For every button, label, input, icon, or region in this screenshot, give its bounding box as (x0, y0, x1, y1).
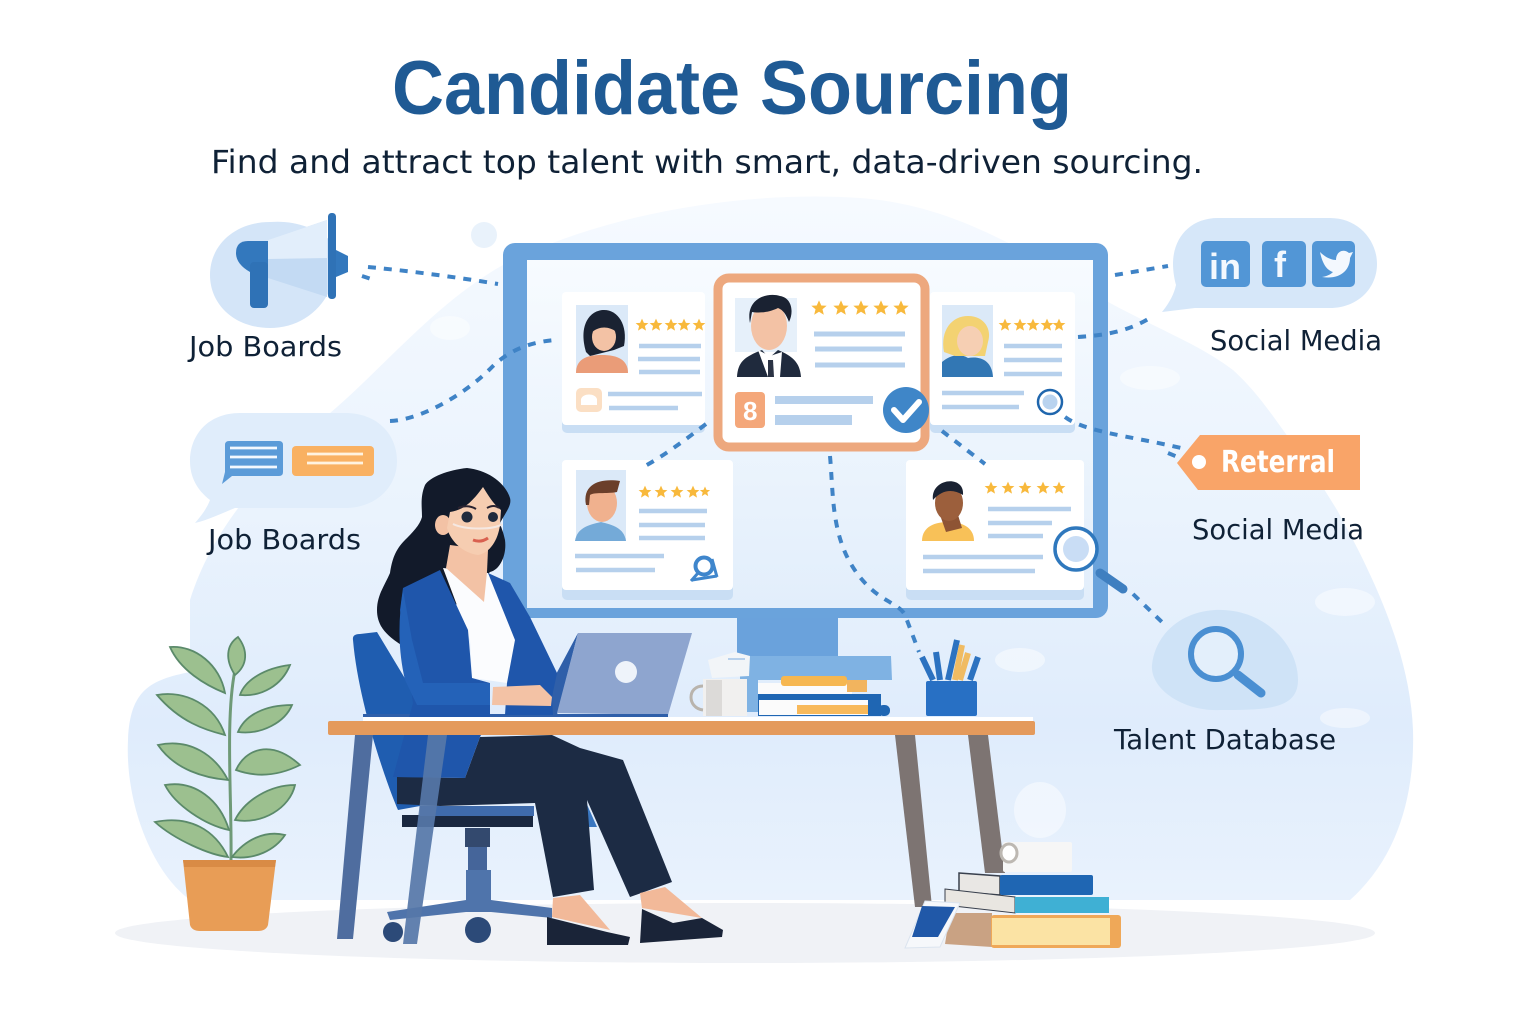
ear (435, 515, 451, 535)
dashed connectors (362, 266, 1181, 652)
face (447, 487, 501, 555)
subtitle: Find and attract top talent with smart, data-driven sourcing. (211, 143, 1203, 181)
label: job boards top: Job Boards (187, 330, 342, 363)
foot left (552, 895, 610, 930)
icon: job boards megaphone (210, 213, 348, 328)
icon: screen magnifier (1055, 528, 1123, 589)
icon: talent database magnifier (1152, 610, 1298, 710)
icon: social media bubble: f (1274, 244, 1287, 285)
background blob (115, 197, 1413, 963)
blazer left (393, 570, 490, 778)
desk legs far side (895, 735, 1005, 907)
blazer right (488, 573, 557, 715)
candidate card: featured centre (718, 278, 929, 447)
hair (377, 468, 510, 646)
label: social media lower: Social Media (1192, 513, 1364, 546)
hand (492, 685, 552, 706)
foot right (640, 887, 702, 918)
plant (155, 637, 300, 931)
candidate card: bottom left (562, 460, 733, 600)
monitor (503, 243, 1108, 712)
neck (446, 545, 488, 602)
label: job boards lower: Job Boards (206, 523, 361, 556)
blazer sleeve (399, 590, 490, 705)
shirt (443, 568, 515, 683)
title: Candidate Sourcing (392, 46, 1072, 131)
chair (353, 632, 597, 943)
desk top (328, 717, 1035, 735)
icon: referral tag: Reterral (1221, 445, 1335, 480)
shoe left (547, 917, 630, 945)
icon: chat bubble job boards (190, 413, 397, 523)
desk items: mug, books, pen cup (691, 640, 978, 716)
books pile floor (905, 842, 1121, 948)
trousers (397, 735, 672, 897)
shoe right (640, 909, 723, 943)
candidate card: top left (562, 292, 705, 433)
icon: social media bubble: in (1209, 246, 1241, 287)
laptop (363, 633, 692, 717)
label: social media top: Social Media (1210, 324, 1382, 357)
candidate card: top right (930, 292, 1075, 433)
candidate card: featured centre: 8 (743, 396, 757, 426)
desk legs near side (337, 735, 447, 944)
candidate card: bottom right (906, 460, 1084, 600)
eyes and mouth (453, 506, 502, 541)
icon: social media bubble (1162, 218, 1377, 312)
icon: referral tag (1177, 435, 1360, 490)
person (377, 468, 723, 945)
label: talent database: Talent Database (1113, 723, 1336, 756)
